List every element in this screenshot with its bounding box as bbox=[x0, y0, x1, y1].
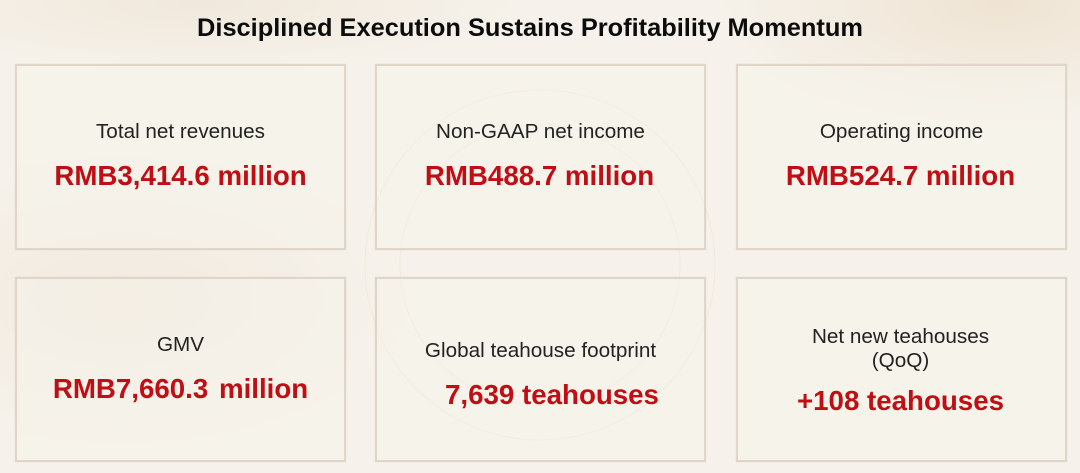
label: GMV: GMV bbox=[157, 333, 204, 356]
value: total net revenues: RMB3,414.6 million bbox=[54, 160, 307, 191]
label: global teahouse footprint: Global teahouse footprint bbox=[425, 339, 656, 362]
label: net new teahouses: (QoQ) bbox=[872, 349, 929, 372]
label: operating income: Operating income bbox=[820, 120, 983, 143]
label: total net revenues: Total net revenues bbox=[96, 120, 265, 143]
value: non-GAAP net income: RMB488.7 million bbox=[425, 160, 654, 191]
panel: GMV bbox=[15, 277, 346, 462]
value: operating income: RMB524.7 million bbox=[786, 160, 1015, 191]
label: net new teahouses bbox=[812, 325, 989, 372]
value: global teahouse footprint: 7,639 teahouses bbox=[445, 379, 659, 410]
panel: global teahouse footprint bbox=[375, 277, 706, 462]
panel: net new teahouses bbox=[736, 277, 1067, 462]
label: net new teahouses: Net new teahouses bbox=[812, 325, 989, 348]
value: net new teahouses: +108 teahouses bbox=[797, 385, 1004, 416]
title: Disciplined Execution Sustains Profitability Momentum bbox=[197, 14, 863, 42]
panel: operating income bbox=[736, 64, 1067, 250]
panel: total net revenues bbox=[15, 64, 346, 250]
label: non-GAAP net income: Non-GAAP net income bbox=[436, 120, 645, 143]
panel: non-GAAP net income bbox=[375, 64, 706, 250]
value: GMV: RMB7,660.3 million bbox=[53, 373, 308, 404]
